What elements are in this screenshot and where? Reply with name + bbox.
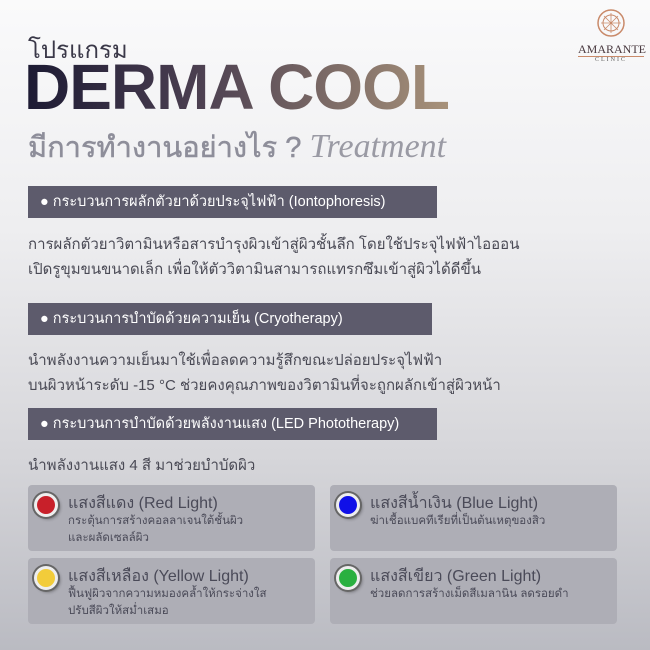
text: iontophoresis: การผลักตัวยาวิตามินหรือสารบำรุงผิวเข้าสู่ผิวชั้นลึก โดยใช้ประจุไฟฟ้าไอออน (28, 236, 519, 253)
text: cryotherapy: บนผิวหน้าระดับ -15 °C ช่วยคงคุณภาพของวิตามินที่จะถูกผลักเข้าสู่ผิวหน้า (28, 377, 501, 394)
text: cryotherapy: นำพลังงานความเย็นมาใช้เพื่อลดความรู้สึกขณะปล่อยประจุไฟฟ้า (28, 352, 442, 369)
card: blue: แสงสีน้ำเงิน (Blue Light) (370, 495, 538, 512)
text: cryotherapy (28, 350, 501, 394)
text: iontophoresis (28, 233, 520, 278)
bar: LED (28, 408, 437, 440)
logo: AMARANTE (578, 42, 646, 56)
bar: LED: ● กระบวนการบำบัดด้วยพลังงานแสง (LED Phototherapy) (40, 416, 399, 432)
card: blue (330, 485, 617, 551)
bar: iontophoresis (28, 186, 437, 218)
bar: iontophoresis: ● กระบวนการผลักตัวยาด้วยประจุไฟฟ้า (Iontophoresis) (40, 194, 386, 210)
card: yellow: แสงสีเหลือง (Yellow Light) (68, 568, 249, 585)
card: green (330, 558, 617, 624)
text: LED: นำพลังงานแสง 4 สี มาช่วยบำบัดผิว (28, 457, 255, 474)
card: yellow: ปรับสีผิวให้สม่ำเสมอ (68, 605, 169, 617)
card: blue: ฆ่าเชื้อแบคทีเรียที่เป็นต้นเหตุของสิว (370, 515, 545, 527)
card: red (28, 485, 315, 551)
title small: โปรแกรม (28, 37, 128, 64)
card: yellow (28, 558, 315, 624)
bar: cryotherapy: ● กระบวนการบำบัดด้วยความเย็น (Cryotherapy) (40, 311, 343, 327)
bar: cryotherapy (28, 303, 432, 335)
main title: DERMA COOL (24, 51, 449, 123)
card: green: แสงสีเขียว (Green Light) (370, 568, 541, 585)
card: green: ช่วยลดการสร้างเม็ดสีเมลานิน ลดรอยดำ (370, 588, 569, 600)
card: red: กระตุ้นการสร้างคอลลาเจนใต้ชั้นผิว (68, 515, 243, 527)
card: yellow: ฟื้นฟูผิวจากความหมองคล้ำให้กระจ่างใส (68, 588, 267, 600)
card: red: แสงสีแดง (Red Light) (68, 495, 218, 512)
logo: CLINIC (595, 57, 627, 63)
card: red: และผลัดเซลล์ผิว (68, 532, 149, 544)
text: iontophoresis: เปิดรูขุมขนขนาดเล็ก เพื่อให้ตัววิตามินสามารถแทรกซึมเข้าสู่ผิวได้ดีขึ้น (28, 261, 481, 278)
subtitle: มีการทำงานอย่างไร ? Treatment (28, 128, 446, 165)
logo (578, 9, 646, 63)
